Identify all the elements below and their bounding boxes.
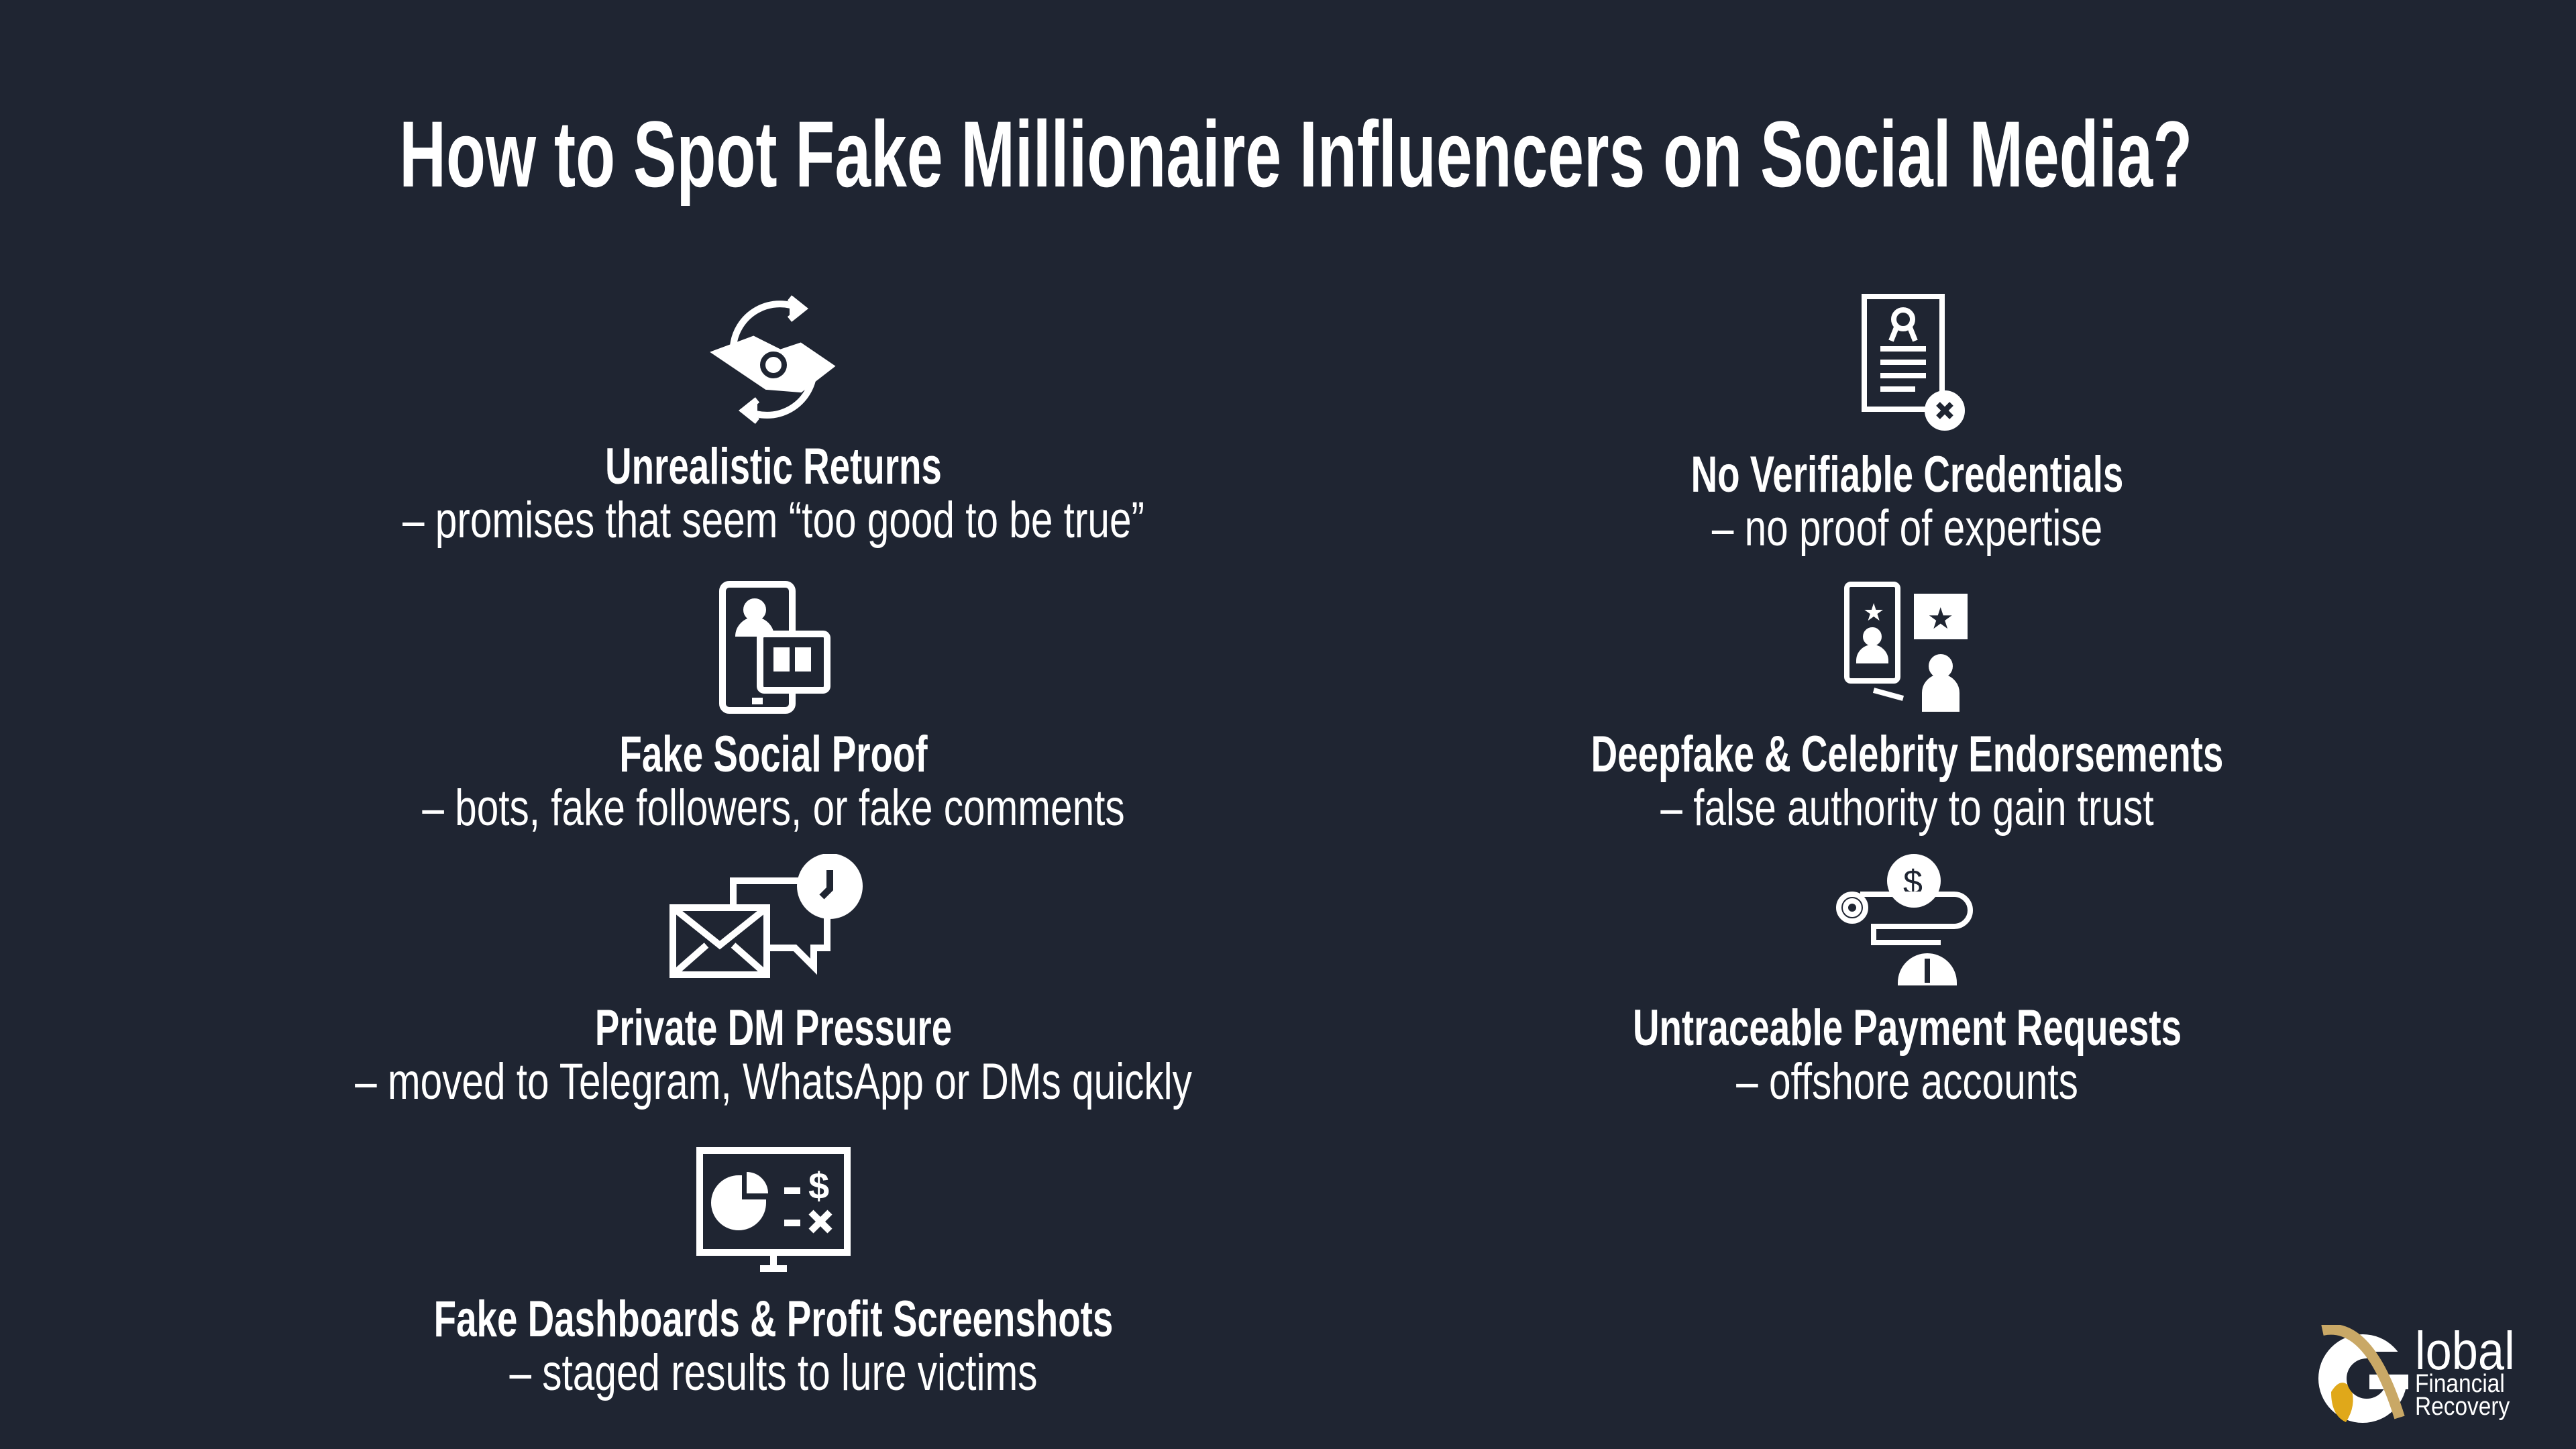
item: unrealistic returns bbox=[402, 295, 1144, 549]
icon: handshake with arrows bbox=[710, 295, 836, 424]
icon: phone with quote bbox=[719, 581, 830, 714]
logo: Recovery bbox=[2415, 1392, 2510, 1420]
icon: monitor with chart: $ bbox=[808, 1165, 829, 1207]
item: fake social proof: Fake Social Proof bbox=[619, 726, 928, 783]
item: fake dashboards: – staged results to lure victims bbox=[509, 1344, 1038, 1401]
title: How to Spot Fake Millionaire Influencers on Social Media? bbox=[399, 101, 2192, 207]
item: unrealistic returns: Unrealistic Returns bbox=[605, 438, 942, 495]
icon: phone with star and person bbox=[1844, 582, 1968, 712]
item: untraceable payment: – offshore accounts bbox=[1736, 1053, 2078, 1110]
icon: monitor with chart bbox=[696, 1147, 851, 1272]
icon: certificate with x bbox=[1862, 294, 1965, 431]
item: fake social proof: – bots, fake followers, or fake comments bbox=[422, 780, 1125, 837]
item: fake dashboards: Fake Dashboards & Profit Screenshots bbox=[434, 1291, 1113, 1348]
item: deepfake endorsements: – false authority to gain trust bbox=[1660, 780, 2154, 837]
icon: search, dollar, mouse bbox=[1836, 854, 1973, 985]
item: fake dashboards bbox=[434, 1147, 1113, 1401]
item: no verifiable credentials: – no proof of expertise bbox=[1712, 500, 2102, 557]
item: untraceable payment: Untraceable Payment Requests bbox=[1633, 1000, 2182, 1057]
item: no verifiable credentials bbox=[1691, 294, 2123, 557]
item: private DM pressure: Private DM Pressure bbox=[595, 1000, 952, 1057]
item: unrealistic returns: – promises that seem “too good to be true” bbox=[402, 492, 1144, 549]
item: deepfake endorsements bbox=[1591, 582, 2223, 837]
item: no verifiable credentials: No Verifiable Credentials bbox=[1691, 446, 2123, 503]
icon: search, dollar, mouse: $ bbox=[1903, 863, 1923, 902]
item: private DM pressure: – moved to Telegram, WhatsApp or DMs quickly bbox=[355, 1053, 1192, 1110]
logo: Financial bbox=[2415, 1369, 2505, 1397]
item: private DM pressure bbox=[355, 854, 1192, 1110]
icon: envelope and clock bubble bbox=[669, 854, 863, 978]
item: fake social proof bbox=[422, 581, 1125, 837]
icon: phone with star and person: ★ bbox=[1927, 602, 1953, 635]
logo bbox=[2318, 1325, 2515, 1423]
icon: phone with star and person: ★ bbox=[1863, 598, 1884, 626]
item: deepfake endorsements: Deepfake & Celebrity Endorsements bbox=[1591, 726, 2223, 783]
item: untraceable payment bbox=[1633, 854, 2182, 1110]
